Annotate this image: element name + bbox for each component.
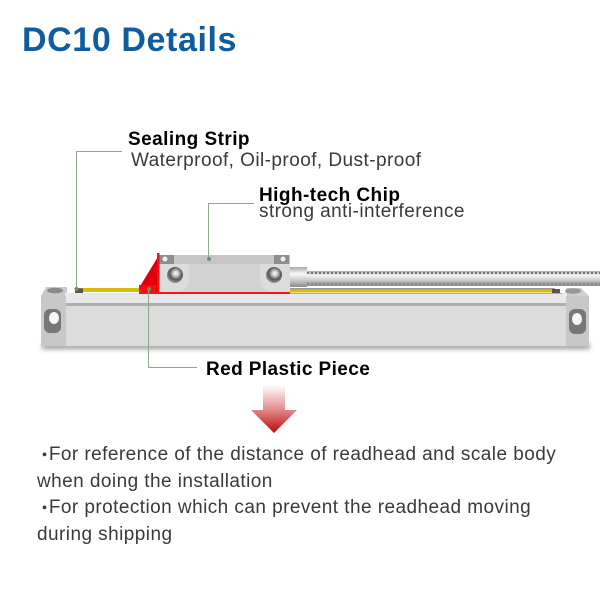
- leader dots: [74, 257, 211, 291]
- down arrow: [251, 385, 297, 433]
- bullet text: shipping protection: during shipping: [37, 524, 172, 545]
- readhead: [159, 255, 290, 293]
- title: DC10 Details: [22, 21, 237, 59]
- sealing strip: [75, 288, 562, 294]
- bullet text: shipping protection: ・For protection which can prevent the readhead moving: [37, 497, 531, 518]
- leader lines: [76, 152, 254, 368]
- description: sealing strip: Waterproof, Oil-proof, Dust-proof: [131, 150, 421, 171]
- cable: [290, 267, 600, 287]
- description: high-tech chip: strong anti-interference: [259, 201, 465, 222]
- label: high-tech chip: High-tech Chip: [259, 185, 400, 206]
- scale body: [41, 287, 590, 349]
- bullet text: distance reference: ・For reference of the distance of readhead and scale body: [37, 444, 556, 465]
- label: red plastic piece: Red Plastic Piece: [206, 359, 370, 380]
- label: sealing strip: Sealing Strip: [128, 129, 250, 150]
- bullet text: shipping protection: [37, 497, 531, 545]
- bullet text: distance reference: [37, 444, 556, 492]
- bullet text: distance reference: when doing the installation: [37, 471, 273, 492]
- red plastic piece: [139, 253, 290, 294]
